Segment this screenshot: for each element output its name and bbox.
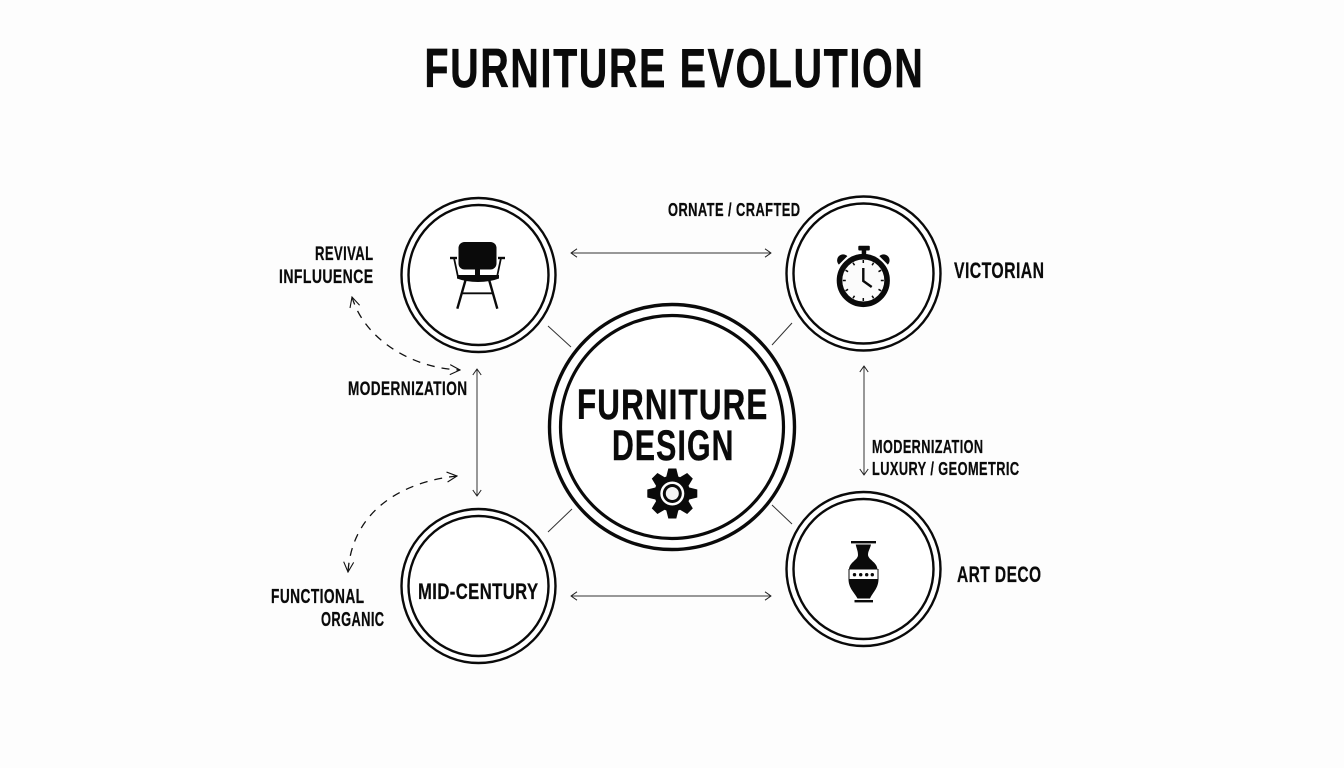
label: Victorian: VICTORIAN xyxy=(954,258,1044,283)
label: Functional Organic: ORGANIC xyxy=(321,609,384,631)
label: Revival Influence: INFLUUENCE xyxy=(279,266,374,288)
label: Modernization left: MODERNIZATION xyxy=(348,379,468,400)
panel: Mid-Century node xyxy=(402,509,556,663)
arrow: dashed upper curve xyxy=(352,297,460,370)
label: Functional Organic xyxy=(271,586,384,631)
hub heading: FURNITURE xyxy=(577,382,768,429)
arrow: top horizontal xyxy=(571,252,771,254)
label: Modernization and Luxury / Geometric xyxy=(872,437,1020,479)
connector spokes xyxy=(548,323,792,532)
title: FURNITURE EVOLUTION xyxy=(424,37,924,99)
label: Functional Organic: FUNCTIONAL xyxy=(271,586,364,608)
label: Modernization and Luxury / Geometric: MODERNIZATION xyxy=(872,437,984,457)
arrow: right vertical xyxy=(863,366,865,475)
label: Modernization and Luxury / Geometric: LUXURY / GEOMETRIC xyxy=(872,459,1020,479)
label: Ornate / Crafted: ORNATE / CRAFTED xyxy=(668,200,800,220)
icon: stopwatch xyxy=(835,246,892,304)
label: Revival Influence xyxy=(279,243,374,288)
panel: chair node xyxy=(402,198,556,352)
icon: gear xyxy=(647,468,697,518)
node label: Mid-Century: MID-CENTURY xyxy=(418,579,538,604)
panel: Art Deco node xyxy=(786,492,940,646)
hub heading: DESIGN xyxy=(612,423,734,470)
icon: vase xyxy=(848,541,878,602)
label: Art Deco: ART DECO xyxy=(957,562,1042,587)
icon: chair xyxy=(450,242,505,309)
label: Revival Influence: REVIVAL xyxy=(315,243,374,265)
panel: central hub xyxy=(550,304,794,550)
arrow: bottom horizontal xyxy=(571,595,771,597)
arrow: left vertical xyxy=(476,369,478,496)
hub heading xyxy=(577,382,768,470)
panel: Victorian node xyxy=(786,196,940,350)
arrow: dashed lower curve xyxy=(348,476,457,572)
